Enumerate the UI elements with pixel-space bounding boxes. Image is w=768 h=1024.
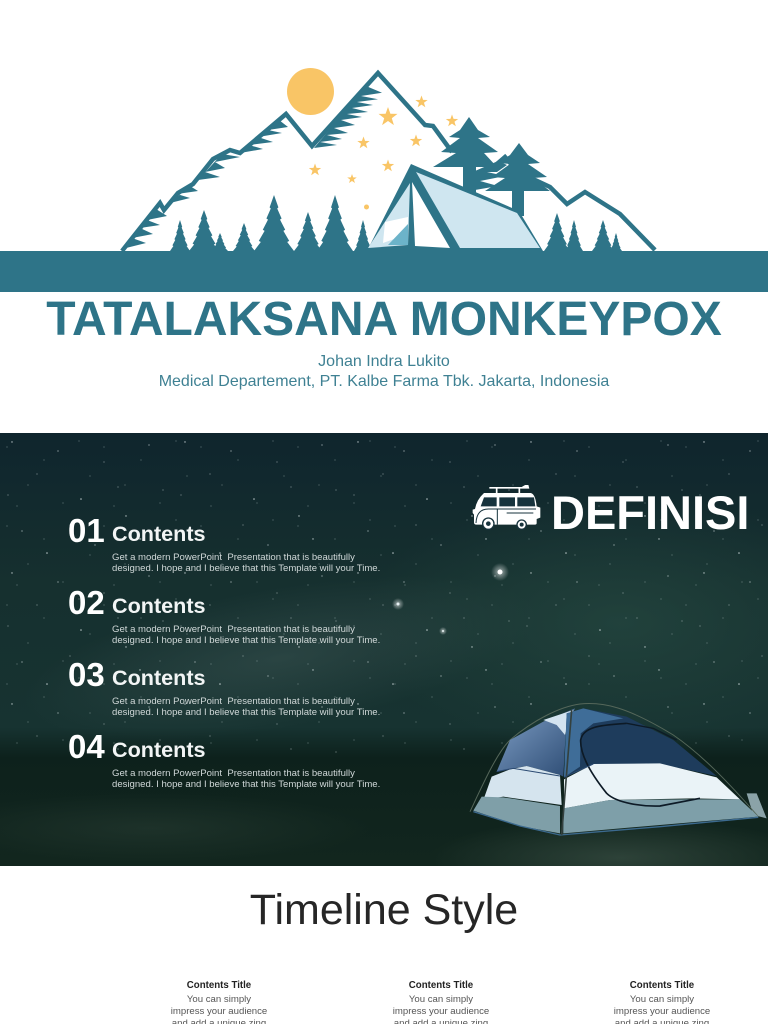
- icon: van: [472, 485, 540, 530]
- mountain camp logo: [0, 68, 768, 292]
- timeline column 2: Contents Title: [409, 980, 473, 991]
- timeline column 3: impress your audience: [614, 1006, 710, 1017]
- timeline column 1: impress your audience: [171, 1006, 267, 1017]
- contents item 04: [68, 728, 380, 790]
- illuminated dome tent: [470, 703, 767, 836]
- contents item 01: 01: [68, 512, 105, 549]
- author and affiliation: [159, 353, 610, 390]
- contents item 01: Contents: [112, 521, 206, 546]
- tree line: [170, 195, 622, 251]
- timeline column 1: You can simply: [187, 994, 251, 1005]
- timeline column 3: Contents Title: [630, 980, 694, 991]
- timeline column 3: You can simply: [630, 994, 694, 1005]
- contents item 02: 02: [68, 584, 105, 621]
- heading text: DEFINISI: [551, 486, 749, 539]
- contents item 02: designed. I hope and I believe that this Template will your Time.: [112, 635, 380, 646]
- timeline column 2: You can simply: [409, 994, 473, 1005]
- contents item 03: 03: [68, 656, 105, 693]
- heading: DEFINISI with van icon: [472, 485, 749, 539]
- contents item 04: Get a modern PowerPoint Presentation that is beautifully: [112, 768, 355, 779]
- timeline column 1: Contents Title: [187, 980, 251, 991]
- contents item 03: Contents: [112, 665, 206, 690]
- contents item 03: designed. I hope and I believe that this Template will your Time.: [112, 707, 380, 718]
- stars: [309, 96, 458, 210]
- timeline column 3: [614, 980, 710, 1024]
- mountain outline: [122, 73, 655, 251]
- contents item 03: Get a modern PowerPoint Presentation that is beautifully: [112, 696, 355, 707]
- contents item 04: designed. I hope and I believe that this Template will your Time.: [112, 779, 380, 790]
- panel: night sky with tent: [0, 433, 768, 866]
- author and affiliation: Johan Indra Lukito: [318, 353, 450, 370]
- contents item 04: 04: [68, 728, 105, 765]
- tall pine trees: [433, 117, 550, 216]
- hatching behind large pines: [475, 161, 507, 190]
- icon: sun: [287, 68, 334, 115]
- contents item 01: Get a modern PowerPoint Presentation that is beautifully: [112, 552, 355, 563]
- contents item 02: [68, 584, 380, 646]
- contents item 04: Contents: [112, 737, 206, 762]
- author and affiliation: Medical Departement, PT. Kalbe Farma Tbk. Jakarta, Indonesia: [159, 373, 609, 390]
- contents item 02: Get a modern PowerPoint Presentation that is beautifully: [112, 624, 355, 635]
- contents item 01: [68, 512, 380, 574]
- tent: [367, 164, 543, 251]
- contents item 03: [68, 656, 380, 718]
- title: TATALAKSANA MONKEYPOX: [46, 293, 722, 346]
- contents item 02: Contents: [112, 593, 206, 618]
- night sky photo: [0, 433, 768, 866]
- teal band: [0, 251, 768, 292]
- timeline column 2: impress your audience: [393, 1006, 489, 1017]
- timeline column 1: [171, 980, 267, 1024]
- heading: timeline style: Timeline Style: [250, 886, 518, 934]
- timeline column 2: [393, 980, 489, 1024]
- contents item 01: designed. I hope and I believe that this Template will your Time.: [112, 563, 380, 574]
